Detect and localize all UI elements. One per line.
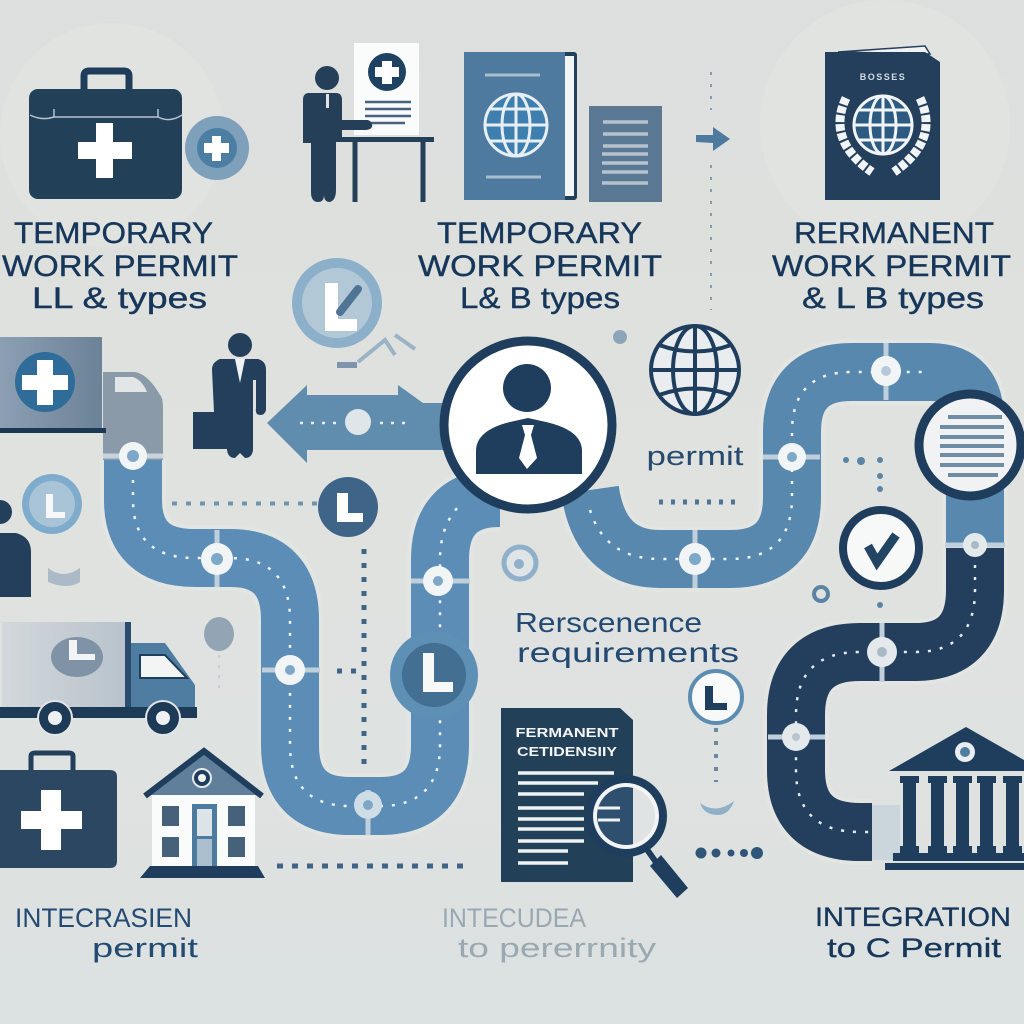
- icon: permanent citizenship document: [501, 708, 633, 882]
- arrow: double arrow to centre: [267, 385, 445, 463]
- icon: ambulance truck top: [0, 337, 163, 460]
- icon: magnifying glass: [585, 775, 688, 898]
- icon: small blob marker: [204, 617, 234, 690]
- heading: temporary work permit left: [2, 217, 238, 315]
- road: blue left route: [133, 460, 500, 806]
- icon: passport blue: [464, 52, 577, 200]
- label: integration to C permit: [815, 902, 1011, 963]
- icon: delivery truck: [0, 622, 197, 735]
- icon: small plus badge: [185, 116, 249, 180]
- heading: temporary work permit left: WORK PERMIT: [2, 250, 238, 283]
- road marker: first stop over truck: [103, 442, 163, 470]
- icon: document: [589, 106, 662, 202]
- road: dark route: [796, 548, 975, 832]
- icon: dotted connector bottom: [277, 864, 463, 868]
- icon: government building: [872, 727, 1024, 870]
- icon: house: [140, 751, 265, 878]
- label: integration permit centre: [442, 903, 657, 963]
- heading: temporary work permit centre: [418, 217, 662, 315]
- icon: small marker: [504, 547, 536, 579]
- icon: dotted connectors: [337, 549, 364, 765]
- label: integration permit left: [15, 903, 199, 963]
- heading: permanent work permit: & L B types: [802, 282, 984, 315]
- heading: temporary work permit left: LL & types: [32, 282, 207, 315]
- label: residence requirements: requirements: [517, 637, 739, 668]
- label: residence requirements: Rerscenence: [515, 607, 702, 638]
- icon: central person: [444, 341, 612, 509]
- icon: globe: [651, 326, 739, 414]
- icon: L badge road: [390, 631, 478, 719]
- icon: dotted connector: [696, 847, 763, 859]
- heading: temporary work permit centre: TEMPORARY: [437, 217, 642, 250]
- icon: permanent citizenship document: CETIDENSIIY: [517, 744, 617, 759]
- icon: checkmark badge: [843, 510, 919, 586]
- label: residence requirements: [515, 607, 739, 668]
- icon: connecting dots near checkmark: [613, 330, 883, 608]
- heading: permanent work permit: [772, 217, 1011, 315]
- label: integration permit centre: INTECUDEA: [442, 903, 586, 933]
- road markers: [201, 343, 1005, 835]
- icon: L badge dark: [172, 477, 378, 537]
- icon: document badge: [919, 394, 1021, 496]
- label: integration permit left: permit: [92, 933, 199, 963]
- icon: L clock badge: [690, 671, 742, 815]
- icon: permanent citizenship document: FERMANENT: [516, 725, 619, 740]
- label: permit: [646, 441, 744, 502]
- label: integration to C permit: to C Permit: [827, 933, 1002, 963]
- road: blue right route: [590, 372, 975, 559]
- heading: permanent work permit: RERMANENT: [794, 217, 994, 250]
- heading: temporary work permit left: TEMPORARY: [14, 217, 213, 250]
- icon: passport emblem: [825, 46, 940, 200]
- icon: medical briefcase: [29, 71, 182, 199]
- heading: temporary work permit centre: L& B types: [460, 282, 620, 315]
- icon: person and L badge left: [0, 474, 82, 597]
- label: integration permit centre: to pererrnity: [458, 933, 657, 963]
- icon: businessman with briefcase: [193, 333, 266, 458]
- label: integration to C permit: INTEGRATION: [815, 902, 1011, 932]
- label: permit: permit: [646, 441, 744, 471]
- heading: temporary work permit centre: WORK PERMIT: [418, 250, 662, 283]
- icon: passport emblem: BOSSES: [860, 72, 906, 82]
- heading: permanent work permit: WORK PERMIT: [772, 250, 1011, 283]
- arrow: small right: [696, 72, 730, 310]
- icon: presenter at desk: [303, 43, 434, 202]
- icon: L badge upper: [292, 258, 415, 368]
- label: integration permit left: INTECRASIEN: [15, 903, 192, 933]
- icon: medical case lower: [0, 753, 117, 868]
